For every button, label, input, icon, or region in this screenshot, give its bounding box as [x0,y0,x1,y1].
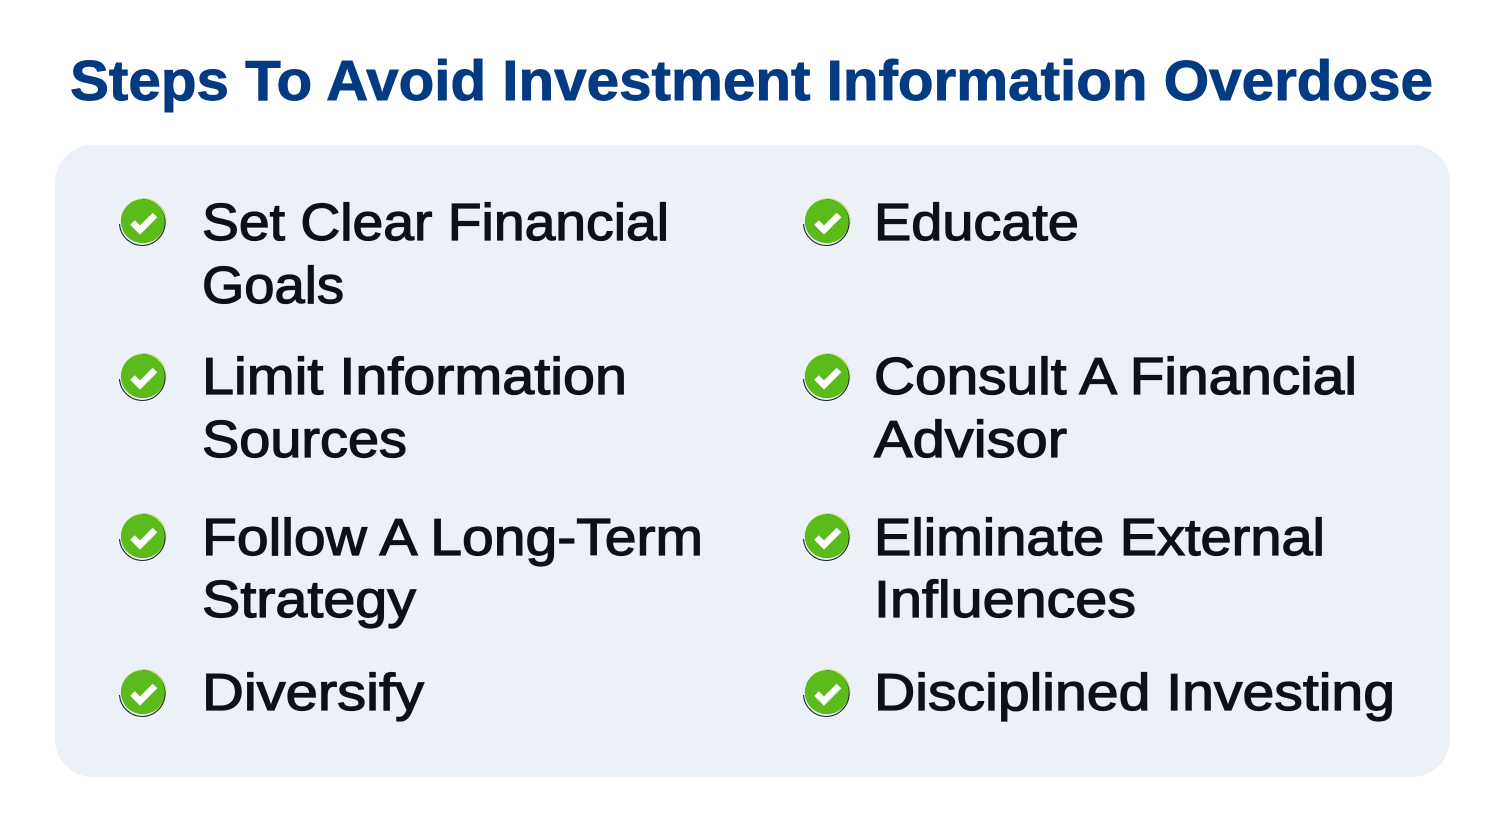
title: Steps To Avoid Investment Information Overdose [70,49,1433,113]
icon: check Eliminate External Influences [804,513,850,560]
step: Set Clear Financial Goals [202,194,669,315]
step: Limit Information Sources: Sources [202,411,407,469]
icon: check Set Clear Financial Goals [120,198,166,246]
step: Limit Information Sources [202,348,627,469]
step: Eliminate External Influences: Influences [874,571,1136,629]
step: Consult A Financial Advisor: Consult A Financial [874,348,1357,406]
step: Follow A Long-Term Strategy [202,509,703,629]
icon: check Diversify [120,669,166,716]
step: Set Clear Financial Goals: Goals [202,257,344,315]
step: Follow A Long-Term Strategy: Follow A Long-Term [202,509,703,567]
step: Disciplined Investing: Disciplined Investing [874,664,1395,722]
step: Consult A Financial Advisor [874,348,1357,469]
step: Consult A Financial Advisor: Advisor [874,411,1067,469]
step: Set Clear Financial Goals: Set Clear Financial [202,194,669,252]
icon: check Disciplined Investing [804,669,850,716]
icon: check Consult A Financial Advisor [804,353,850,400]
step: Follow A Long-Term Strategy: Strategy [202,571,416,629]
icon: check Follow A Long-Term Strategy [120,513,166,560]
step: Diversify: Diversify [202,664,424,722]
icon: check Limit Information Sources [120,353,166,400]
panel: steps [55,145,1450,777]
icon: check Educate [804,198,850,246]
step: Educate: Educate [874,194,1079,252]
step: Eliminate External Influences [874,509,1325,629]
step: Eliminate External Influences: Eliminate External [874,509,1325,567]
step: Limit Information Sources: Limit Information [202,348,627,406]
